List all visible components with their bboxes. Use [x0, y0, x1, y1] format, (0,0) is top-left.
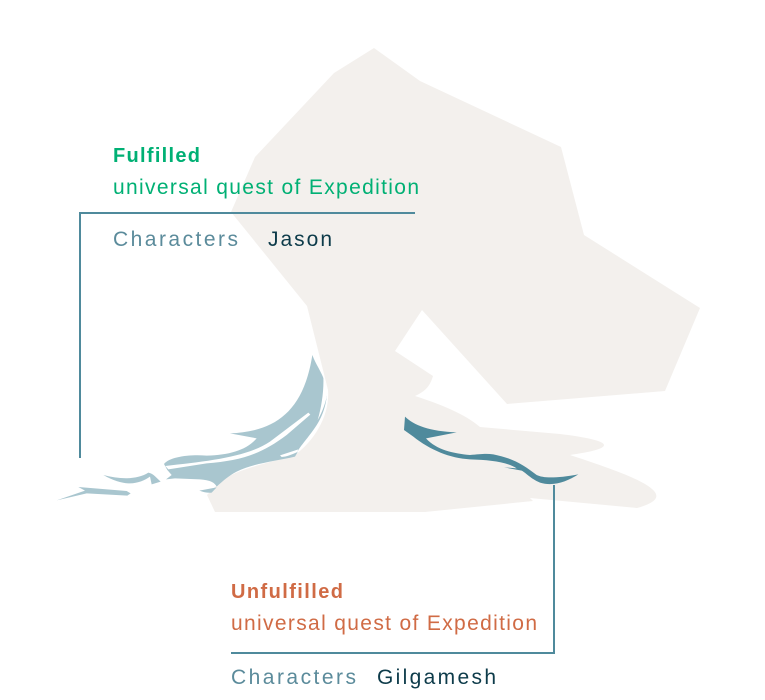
subheading: quest: universal quest of Expedition [231, 612, 537, 635]
background silhouette [207, 48, 700, 512]
character name: Gilgamesh: Gilgamesh [377, 666, 496, 689]
character name: Jason: Jason [268, 228, 332, 251]
subheading: quest: universal quest of Expedition [113, 176, 419, 199]
heading: Fulfilled: Fulfilled [113, 145, 200, 167]
heading: Unfulfilled: Unfulfilled [231, 581, 343, 603]
unfulfilled wave: Gilgamesh [404, 417, 578, 484]
characters label: Characters [231, 666, 356, 689]
label block: unfulfilled [231, 581, 537, 689]
characters label: Characters [113, 228, 238, 251]
label block: fulfilled [113, 145, 419, 251]
connector line: unfulfilled [231, 485, 554, 653]
connector line: fulfilled [80, 213, 415, 458]
fulfilled wave: Jason [57, 355, 328, 500]
